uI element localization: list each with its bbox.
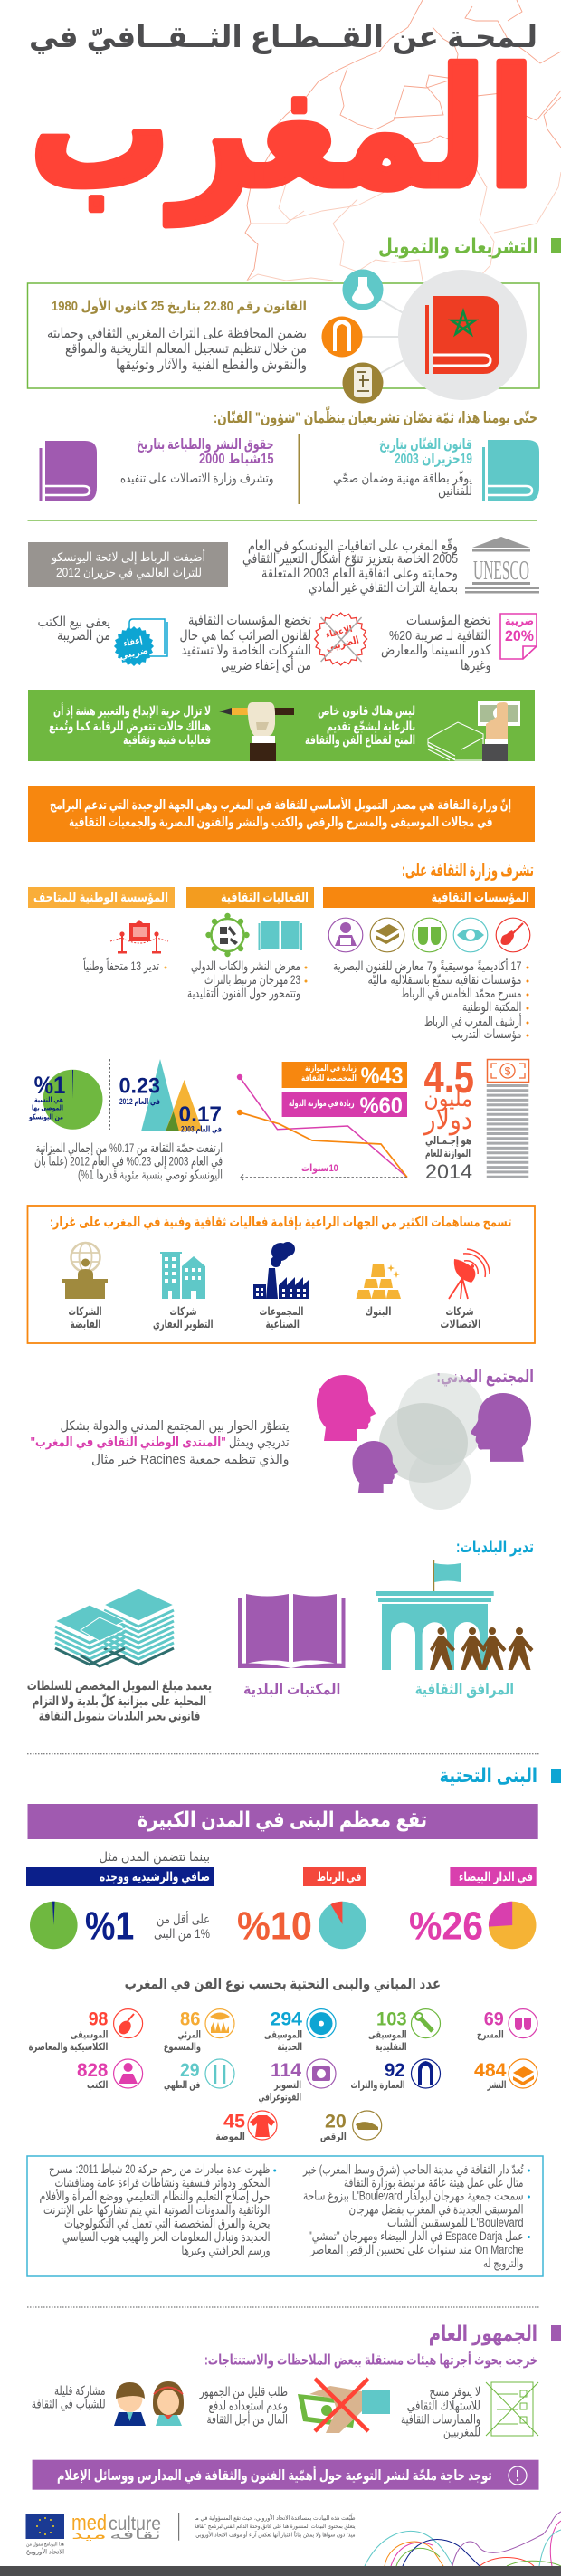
survey text — [401, 2384, 480, 2440]
footer: MedCulture logo: med — [71, 2511, 107, 2535]
list: left column: الوثائقية والمدونات الصوتية التي يتم تشاركها على الإنترنت — [43, 2203, 270, 2218]
subtitle: لـمحـة عن القــطـاع الثــقــافيّ في — [29, 20, 537, 55]
list: left column: ورسم الجرافيتي وغيرها — [181, 2244, 270, 2258]
icon: person reading — [328, 918, 363, 952]
stat: theatre 69: 69 — [484, 2009, 504, 2030]
panel: local initiatives box — [27, 2156, 543, 2276]
freedom text: لا تزال حرية الإبداع والتعبير هشة إذ أن — [53, 702, 211, 719]
label: 0.23: في العام 2012 — [119, 1097, 160, 1107]
bullet list: events: معرض النشر والكتاب الدولي — [191, 959, 300, 974]
youth text — [32, 2383, 106, 2412]
list: left column: بحرية والفرق المتخصصة التي تعمل في التكنولوجيات — [64, 2217, 270, 2231]
pie chart 10% — [319, 1902, 366, 1949]
survey text: لا يتوفر مسح — [429, 2384, 480, 2399]
icon: tax-exempt badge on book: ضريبي — [119, 646, 149, 662]
artist law text: يوفّر بطاقة مهنية وضمان صحّي — [333, 471, 472, 486]
chart: UNESCO recommendation pie: الموصى بها — [32, 1104, 63, 1112]
figure: 4.5 million dollars: هو إجـمـالي — [425, 1134, 471, 1148]
chart: UNESCO recommendation pie — [28, 1070, 103, 1130]
line chart: budget growth — [237, 1062, 407, 1180]
panel: law 22.80 — [27, 270, 539, 404]
stat: photography 114: التصوير — [273, 2080, 301, 2091]
city label: في الرباط — [317, 1870, 361, 1884]
pie chart 1% — [30, 1902, 78, 1949]
stat: culinary arts 29: 29 — [180, 2060, 200, 2081]
connector lines — [342, 290, 425, 383]
stat: traditional music 103: التقليدية — [375, 2042, 407, 2053]
stat: architecture 92: العمارة والتراث — [351, 2080, 405, 2091]
law description — [47, 326, 307, 373]
UNESCO text — [242, 538, 458, 596]
footer: MedCulture logo: ثقافة — [109, 2527, 161, 2542]
panel: UNESCO — [28, 537, 539, 596]
stat: fashion 45: الموضة — [215, 2132, 245, 2142]
book sale text: من الضريبة — [57, 628, 110, 644]
footer: disclaimer text: ميد" دون سواها ولا يمكن بتاتاً اعتبار أنها تعكس آراء أو موقف الاتحاد الأوروبي. — [195, 2530, 356, 2539]
header bar — [28, 887, 175, 908]
bullet list: events: وتتمحور حول الفنون التقليدية — [187, 986, 300, 1001]
icon: stacks of money — [55, 1589, 174, 1666]
icon: crossed stamp: الضريبي — [325, 634, 360, 654]
panel: smaller cities share — [26, 1849, 214, 1949]
icon: eye — [453, 918, 488, 952]
list: right column — [273, 2163, 530, 2271]
icon: dollar note — [487, 1059, 528, 1178]
text: civil society — [31, 1419, 290, 1467]
figure: 4.5 million dollars — [423, 1054, 474, 1183]
stat: traditional music 103: الموسيقى — [368, 2030, 407, 2041]
panel: private sponsors — [27, 1206, 535, 1343]
stat: publishing 484: النشر — [487, 2080, 507, 2091]
panel: copyright law: 15شباط 2000 — [199, 452, 274, 467]
icon: crossed stamp: الإعفاء — [325, 625, 354, 641]
note: less than 1%: 1% من البنى — [154, 1926, 210, 1942]
stat: fashion 45: 45 — [223, 2112, 245, 2132]
stat: books 828 — [77, 2059, 143, 2091]
panel: artist law: 19حزيران 2003 — [395, 452, 472, 467]
note: less than 1% — [154, 1911, 210, 1942]
stat: dance 20: الرقص — [320, 2132, 347, 2142]
book sale text: يعفى بيع الكتب — [38, 615, 110, 630]
stat: 43% — [282, 1062, 407, 1089]
icon: tax-exempt badge on book: إعفاء — [123, 635, 143, 649]
sponsor: industrial groups — [253, 1242, 309, 1331]
city label — [450, 1867, 537, 1886]
icon: brown inscribed stone — [342, 362, 384, 404]
stat: classical music 98: الموسيقى — [71, 2030, 108, 2041]
stat: modern music 294: 294 — [270, 2009, 302, 2030]
panel: low willingness to pay — [199, 2379, 390, 2433]
icon: big open book — [238, 1594, 346, 1668]
chart: culture share triangles — [119, 1059, 222, 1135]
chart: UNESCO recommendation pie: %1 — [34, 1072, 65, 1099]
panel: copyright law — [40, 437, 274, 501]
chart: 2014 budget — [237, 1054, 528, 1183]
text: civil society: يتطوّر الحوار بين المجتمع المدني والدولة بشكل — [60, 1419, 290, 1434]
heading: count by art type: عدد المباني والبنى التحتية بحسب نوع الفن في المغرب — [125, 1977, 441, 1993]
footer: disclaimer text: طُبّعت هذه البيانات بمساعدة الاتحاد الأوروبي، حيث تقع المسؤولية في ما — [195, 2514, 356, 2522]
panel: Rabat share — [237, 1867, 366, 1949]
panel: national museums foundation — [28, 887, 175, 974]
bullet list: events: 23 مهرجان مرتبط بالتراث — [204, 972, 300, 987]
footer: EU funding logo: الاتحاد الأوروبيّ — [26, 2548, 64, 2556]
stat: photography 114 — [259, 2059, 336, 2104]
tax text: وغيرها — [461, 658, 490, 673]
stats grid: art infrastructure — [29, 2009, 537, 2142]
icon: stack of paper — [370, 918, 404, 952]
law description: يضمن المحافظة على التراث المغربي الثقافي وحمايته — [47, 326, 307, 342]
stat: modern music 294: الموسيقى — [264, 2030, 302, 2041]
icon: guitar — [496, 918, 530, 952]
survey text: والممارسات الثقافية — [401, 2412, 480, 2428]
exemption text: لقانون الضرائب كما هي حال — [179, 628, 311, 644]
icon: crossed stamp — [315, 613, 367, 665]
panel: tax 20% — [381, 613, 537, 673]
callout: need for awareness — [33, 2460, 539, 2490]
icon: crossed hand paying — [298, 2379, 390, 2433]
freedom text: هنالك حالات تتعرض للرقابة كما وتُمنع — [49, 719, 211, 734]
icon: museum frame and stanchions — [110, 920, 168, 954]
footer: disclaimer text — [195, 2514, 356, 2539]
city label — [26, 1867, 214, 1886]
list: left column: حول إصلاح التعليم والنظام التعليمي ووضع المرأة والأفلام — [40, 2188, 270, 2204]
sponsorship text: ليس هناك قانون خاص — [318, 703, 415, 719]
callout: Rabat heritage list: أضيفت الرباط إلى لائحة اليونسكو — [51, 549, 205, 565]
list: right column: سمحت جمعية مهرجان لبولفار L'Boulevard ببزوغ ساحة — [303, 2190, 523, 2204]
sponsor: real estate developers: شركات — [170, 1305, 197, 1318]
copyright law text: وتشرف وزارة الاتصالات على تنفيذه — [120, 471, 273, 486]
footer: EU funding logo: هذا البرنامج ممول من — [26, 2542, 64, 2548]
payment text: المال من أجل الثقافة — [206, 2411, 288, 2428]
book sale text — [38, 615, 110, 644]
icon: open book — [259, 921, 302, 950]
icon: hand with banknote over paper stack — [428, 701, 520, 761]
stat: 60%: زيادة في موازنة الدولة — [289, 1099, 355, 1109]
figure: 4.5 million dollars: الموازنة للعام — [425, 1147, 471, 1160]
law title: القانون رقم 22.80 بتاريخ 25 كانون الأول 1980 — [52, 298, 307, 314]
stat: books 828: 828 — [77, 2060, 109, 2081]
panel: low youth participation — [32, 2381, 184, 2426]
icon: book with Moroccan flag — [398, 270, 527, 400]
heading: municipalities: تدير البلديات: — [456, 1538, 534, 1557]
axis: 10 years — [241, 1163, 407, 1180]
list: left column: المحكور ودوائر فلسفية ونشاطات قراءة عامة ومناقشات — [54, 2176, 270, 2190]
list: right column: عمل Espace Darja في الدار البيضاء ومهرجان "تمشي" — [309, 2229, 523, 2244]
text: civil society: تدريجي ويمثل "المنتدى الوطني الثقافي في المغرب" — [31, 1436, 290, 1450]
stat: dance 20 — [320, 2111, 382, 2142]
icon: festival ring — [205, 913, 250, 957]
figure: 4.5 million dollars: مليون — [423, 1086, 472, 1111]
stat: modern music 294: الحديثة — [277, 2042, 302, 2053]
list: right column: L'Boulevard للموسيقيين الشباب — [387, 2216, 523, 2230]
icon: teal book — [482, 440, 539, 501]
sponsorship text: بالرعاية ليشجّع تقديم — [327, 719, 415, 734]
sponsorship text — [305, 703, 415, 748]
bullet list: institutions: أرشيف المغرب في الرباط — [424, 1013, 522, 1029]
sponsor: telecoms: شركات — [445, 1305, 474, 1318]
panel: green sponsorship and freedom band — [28, 690, 535, 761]
stat: 43%: زيادة في الموازنة — [305, 1064, 357, 1073]
law description: من خلال تنظيم تسجيل المعالم التاريخية والمواقع — [65, 341, 307, 357]
freedom text — [49, 702, 211, 748]
list: left column: ظهرت عدة مبادرات من رحم حركة 20 شباط 2011: مسرح — [49, 2162, 270, 2177]
header bar — [186, 887, 314, 908]
youth text: للشباب في الثقافة — [32, 2397, 106, 2412]
banner: most structures in big cities: تقع معظم البنى في المدن الكبيرة — [138, 1808, 427, 1832]
icon: UNESCO temple — [465, 537, 539, 594]
icon: tax-exempt badge on book — [114, 619, 167, 666]
footer: disclaimer text: يتعلق بمحتوى البيانات المنشورة هنا على عاتق وحدة الدعم الفني لبرنامج "ثقافة — [195, 2524, 356, 2530]
icon: dollar note: $ — [505, 1064, 511, 1077]
museums text: تدير 13 متحفاً وطنياً — [83, 957, 159, 974]
stat: audiovisual 86: والمسموع — [164, 2042, 201, 2053]
icon: teal flask — [342, 270, 384, 310]
footer: MedCulture logo — [71, 2511, 161, 2542]
survey text: للاستهلاك الثقافي — [407, 2399, 480, 2414]
panel: Casablanca share — [409, 1867, 537, 1949]
stat: audiovisual 86 — [164, 2009, 234, 2053]
stat: traditional music 103: 103 — [376, 2009, 407, 2030]
list: left column — [40, 2162, 270, 2258]
panel: cultural institutions — [323, 887, 535, 1042]
icon: theatre masks — [413, 918, 446, 952]
callout: Rabat heritage list — [28, 542, 228, 587]
bullet list: institutions: 17 أكاديميةً موسيقيةً و7 معارض للفنون البصرية — [333, 958, 522, 974]
stat: architecture 92 — [351, 2059, 440, 2091]
header bar — [323, 887, 535, 908]
bullet list: institutions: مؤسسات التدريب — [452, 1026, 521, 1042]
tax text: الثقافية لـ ضريبة 20% — [389, 628, 490, 644]
exemption text: الشركات الخاصة ولا تستفيد — [181, 643, 311, 658]
text: civil society: والذي تنظمه جمعية Racines خير مثال — [91, 1453, 290, 1467]
label: المكتبات البلدية — [243, 1681, 340, 1698]
youth text: مشاركة قليلة — [54, 2383, 106, 2399]
figure: 1%: %1 — [85, 1904, 134, 1949]
tax text: تخضع المؤسسات — [406, 613, 490, 628]
footer: MedCulture logo: culture — [109, 2514, 161, 2534]
city label — [303, 1867, 366, 1886]
icon: crossed checklist — [486, 2382, 538, 2436]
axis: 10 years: 10سنوات — [301, 1163, 338, 1174]
text: culture share paragraph: في العام 2003 إلى 0.23% في العام 2012 (علماً بأن — [34, 1152, 223, 1169]
stat: classical music 98: 98 — [89, 2009, 109, 2030]
stat: publishing 484: 484 — [474, 2060, 507, 2081]
icon: tax note: ضريبة — [505, 615, 534, 627]
survey text: للمغربيين — [443, 2425, 480, 2440]
tax text: كدور السينما والمعارض — [381, 643, 491, 658]
pie chart 26% — [489, 1902, 536, 1949]
stat: classical music 98: الكلاسيكية والمعاصرة — [29, 2042, 108, 2053]
bullet list: events — [187, 959, 308, 1001]
figure: 26%: %26 — [409, 1904, 483, 1949]
stat: 43%: %43 — [361, 1064, 404, 1089]
lead-in text: بينما تتضمن المدن مثل — [100, 1849, 210, 1865]
note: less than 1%: على أقل من — [157, 1911, 210, 1927]
stat: photography 114: الفوتوغرافي — [259, 2093, 301, 2104]
stat: theatre 69 — [477, 2009, 537, 2041]
section heading: infrastructure: البنى التحتية — [440, 1764, 537, 1787]
exemption text — [179, 613, 311, 674]
sponsorship text: المنح لقطاع الفن والثقافة — [305, 732, 415, 748]
stat: dance 20: 20 — [325, 2112, 347, 2132]
icon: boy and girl — [114, 2381, 184, 2426]
figure: 4.5 million dollars: دولار — [423, 1105, 472, 1136]
payment text: طلب قليل من الجمهور — [199, 2384, 288, 2399]
sponsor: real estate developers — [153, 1252, 214, 1331]
list: right column: والترويج له — [483, 2256, 523, 2271]
stat: culinary arts 29 — [164, 2059, 234, 2091]
payment text: وعدم استعداده لدفع — [208, 2399, 288, 2414]
icon: tax note: 20% — [505, 627, 534, 644]
law description: والنقوش والقطع الفنية والآثار وتوثيقها — [116, 358, 307, 373]
icon: exclamation mark — [509, 2466, 527, 2485]
UNESCO text: 2005 الخاصة بتعزيز تنوّع أشكال التعبير الثقافي — [242, 549, 458, 568]
stat: audiovisual 86: المرئي — [177, 2030, 201, 2041]
stat: 60% — [282, 1092, 407, 1119]
icon: building with people — [376, 1560, 534, 1670]
figure: 10%: %10 — [237, 1904, 312, 1949]
background map of Morocco — [245, 0, 561, 281]
sponsor: industrial groups: المجموعات — [259, 1305, 304, 1318]
panel: cultural events — [186, 887, 314, 1001]
callout: ministry of culture is main funder — [28, 786, 535, 842]
header bar: المؤسسة الوطنية للمتاحف — [33, 891, 168, 905]
label: 0.17: في العام 2003 — [181, 1125, 222, 1135]
figure: 4.5 million dollars: 4.5 — [423, 1054, 474, 1102]
panel: municipal libraries — [238, 1594, 346, 1698]
funding text: يعتمد مبلغ التمويل المخصص للسلطات — [27, 1678, 212, 1693]
panel: artist law: للفنانين — [438, 483, 472, 499]
funding text: المحلية على ميزانية كلّ بلدية ولا التزام — [33, 1693, 206, 1709]
stat: 60%: %60 — [360, 1093, 403, 1119]
exemption text: تخضع المؤسسات الثقافية — [188, 613, 311, 628]
bullet list: institutions: مؤسسات ثقافية تتمتّع باستقلالية ماليّة — [367, 972, 521, 987]
stat: photography 114: 114 — [271, 2060, 301, 2081]
sponsor: telecoms — [440, 1249, 490, 1331]
label: 0.17: 0.17 — [179, 1102, 222, 1127]
UNESCO text: وحمايته وعلى اتفاقية العام 2003 المتعلقة — [261, 566, 458, 581]
sponsor: telecoms: الاتصالات — [440, 1318, 481, 1331]
panel: municipal funding — [27, 1589, 212, 1724]
label: 0.23: 0.23 — [119, 1074, 160, 1099]
icon: purple book — [40, 441, 97, 501]
copyright law title: حقوق النشر والطباعة بتاريخ — [137, 437, 273, 453]
sponsor: industrial groups: الصناعية — [266, 1318, 300, 1331]
footer scribble decoration — [365, 2512, 561, 2566]
city label: في الدار البيضاء — [459, 1870, 533, 1884]
panel: cultural facilities — [376, 1560, 534, 1699]
payment text — [199, 2384, 288, 2428]
tax text — [381, 613, 491, 673]
city label: صافي والرشيدية ووجدة — [100, 1870, 210, 1884]
sponsor: holding companies: القابضة — [71, 1318, 101, 1331]
artist law title: قانون الفنّان بتاريخ — [379, 437, 472, 453]
chart: UNESCO recommendation pie: هي النسبة — [34, 1096, 63, 1104]
stat: books 828: الكتب — [87, 2080, 108, 2091]
stat: culinary arts 29: فن الطهي — [164, 2080, 200, 2091]
label: المرافق الثقافية — [415, 1681, 514, 1699]
sponsor: holding companies — [62, 1243, 108, 1331]
sponsor: banks — [357, 1264, 401, 1318]
panel: artist law — [333, 437, 539, 501]
stat: classical music 98 — [29, 2009, 143, 2053]
panel: no consumption survey — [401, 2382, 538, 2440]
sponsor: holding companies: الشركات — [69, 1305, 101, 1318]
icon: orange arch — [322, 317, 362, 357]
illustration: talking heads — [317, 1373, 531, 1510]
chart: UNESCO recommendation pie: من اليونسكو — [28, 1113, 63, 1121]
bullet list: institutions: المكتبة الوطنية — [462, 999, 521, 1015]
footer: MedCulture logo: ميد — [71, 2527, 107, 2542]
icon: fist holding pencil — [219, 702, 294, 761]
stat: publishing 484 — [474, 2059, 537, 2091]
header bar: المؤسسات الثقافية — [431, 891, 529, 905]
text: culture share paragraph: ارتفعت حصّة الثقافة من 0.17% من إجمالي الميزانية — [36, 1140, 223, 1156]
panel: no tax exemption — [179, 613, 367, 674]
stat: theatre 69: المسرح — [477, 2030, 504, 2041]
freedom text: فعاليات فنية وثقافية — [123, 732, 211, 748]
stat: traditional music 103 — [368, 2009, 440, 2053]
bullet list: institutions — [333, 958, 528, 1042]
UNESCO text: وقّع المغرب على اتفاقيات اليونسكو في العام — [248, 538, 458, 555]
funding text: قانوني يجبر البلديات بتمويل الثقافة — [39, 1709, 200, 1724]
sponsor: real estate developers: التطوير العقاري — [153, 1318, 214, 1331]
stat: 43%: المخصصة للثقافة — [301, 1073, 357, 1083]
sponsor: banks: البنوك — [366, 1305, 391, 1318]
text: culture share paragraph — [34, 1140, 223, 1183]
callout: Rabat heritage list: للتراث العالمي في حزيران 2012 — [56, 566, 202, 580]
stat: fashion 45 — [215, 2111, 277, 2142]
footer: EU funding logo — [25, 2514, 64, 2556]
panel: book sales exempt — [38, 615, 167, 666]
figure: 4.5 million dollars: 2014 — [425, 1160, 472, 1183]
list: left column: الجديدة وتبادل المعلومات الحر والهيب هوب السياسي — [62, 2230, 270, 2245]
exemption text: من أي إعفاء ضريبي — [221, 656, 311, 674]
funding text — [27, 1678, 212, 1724]
stat: architecture 92: 92 — [385, 2060, 405, 2081]
icon: tax note — [500, 614, 537, 659]
stat: modern music 294 — [264, 2009, 336, 2053]
list: right column: On Marche منذ سنوات على تحسين الرقص المعاصر — [309, 2243, 523, 2257]
stat: audiovisual 86: 86 — [180, 2009, 200, 2030]
header bar: الفعاليات الثقافية — [221, 891, 309, 905]
banner: most structures in big cities — [27, 1804, 538, 1839]
text: culture share paragraph: اليونسكو توصي بنسبة مئوية قدرها 1%) — [78, 1168, 223, 1183]
UNESCO text: بحماية التراث الثقافي غير المادي — [309, 580, 458, 596]
